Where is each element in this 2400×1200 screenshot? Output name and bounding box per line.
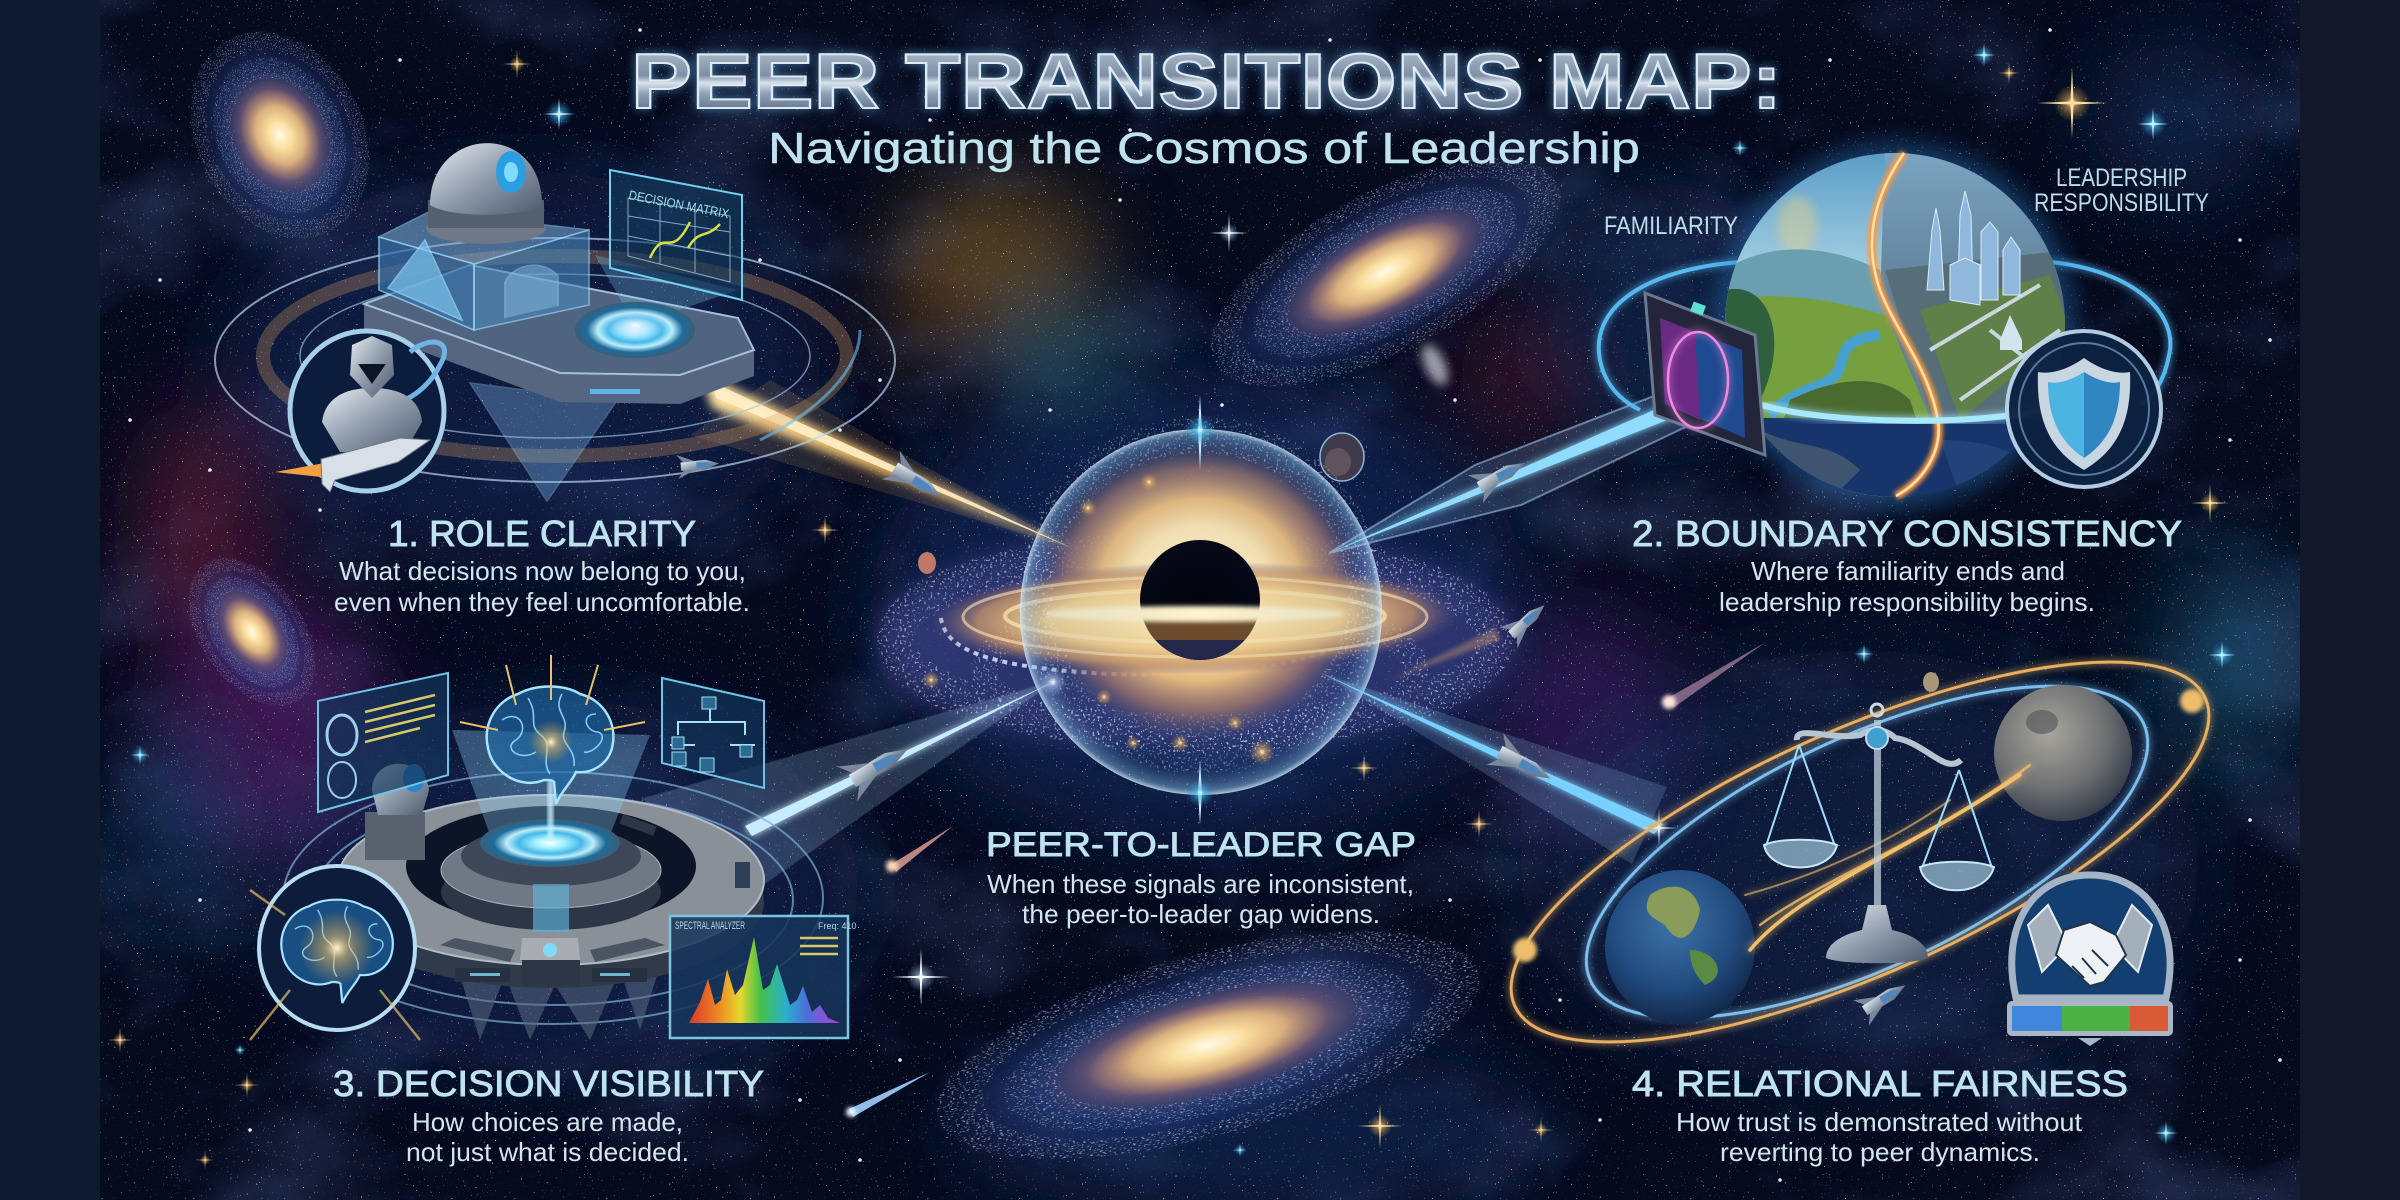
station ring (338, 795, 764, 988)
title: PEER TRANSITIONS MAP: (631, 37, 1782, 125)
decision matrix panel: DECISION MATRIX (627, 187, 731, 221)
description: leadership responsibility begins. (1719, 587, 2095, 617)
earth planet (1605, 870, 1755, 1024)
description: the peer-to-leader gap widens. (1022, 899, 1380, 929)
description: even when they feel uncomfortable. (334, 587, 750, 617)
label: leadership responsibility: LEADERSHIP (2056, 164, 2187, 192)
connector: role clarity beam (690, 372, 1072, 548)
shield medallion (2007, 331, 2161, 487)
moon planet (1994, 685, 2132, 821)
small pale galaxy (1417, 341, 1453, 389)
trust gauge (2007, 1001, 2173, 1046)
description: What decisions now belong to you, (339, 556, 746, 586)
connector: decision beam (643, 668, 1067, 883)
observatory dome (426, 143, 546, 244)
black hole: outer swirl (875, 530, 1515, 750)
panel: role clarity (215, 143, 895, 617)
orbit rings (283, 772, 823, 1024)
black hole: golden halo (1032, 438, 1368, 742)
blue orbit (1542, 619, 2192, 1085)
description (987, 869, 1414, 929)
small planet near black hole (1320, 433, 1364, 481)
comets (846, 628, 1766, 1117)
right flowchart panel (662, 678, 764, 788)
panel: relational fairness (1465, 587, 2255, 1167)
portal (1645, 293, 1765, 455)
left data panel (318, 673, 448, 812)
black hole: accretion disk (929, 557, 1461, 679)
spectral analyzer (670, 916, 857, 1038)
heading: 1. ROLE CLARITY (388, 513, 696, 554)
heading: 3. DECISION VISIBILITY (333, 1063, 764, 1104)
energy ring back (1599, 262, 2170, 410)
description (406, 1107, 689, 1167)
description (1676, 1107, 2083, 1167)
hologram brain (460, 655, 645, 804)
panel: decision visibility (250, 655, 857, 1167)
black hole: glass sphere (1020, 429, 1382, 795)
left margin band (0, 0, 100, 1200)
description: reverting to peer dynamics. (1720, 1137, 2040, 1167)
heading: 2. BOUNDARY CONSISTENCY (1632, 513, 2182, 554)
galaxy: small left (159, 531, 345, 733)
black hole: band across horizon (1045, 606, 1345, 662)
black hole: sphere flares and lights (918, 395, 1275, 825)
handshake medallion (2012, 875, 2170, 998)
label: familiarity: FAMILIARITY (1604, 212, 1738, 240)
small ship (1853, 973, 1913, 1026)
orbit rings (215, 238, 895, 482)
label: leadership responsibility (2034, 164, 2209, 217)
station spikes (455, 950, 665, 1040)
decision matrix panel (610, 170, 742, 300)
black hole: sphere speckle (1035, 435, 1365, 755)
orbit nodes (1513, 672, 2204, 962)
small orbit ship (676, 451, 720, 479)
galaxy: upper centre (1169, 105, 1601, 439)
energy ring front (1762, 405, 2040, 421)
panel: gap (986, 826, 1416, 929)
ship near black hole (1499, 595, 1554, 648)
galaxy: upper left (151, 0, 409, 275)
hologram cone (595, 255, 738, 325)
inverted crystal (470, 383, 616, 501)
description: When these signals are inconsistent, (987, 869, 1414, 899)
description: Where familiarity ends and (1751, 556, 2065, 586)
gold orbit (1465, 587, 2255, 1117)
description (1719, 556, 2095, 617)
subtitle: Navigating the Cosmos of Leadership (768, 124, 1640, 173)
station hub (441, 826, 661, 932)
brain medallion (250, 866, 420, 1040)
light pad (575, 302, 695, 358)
description: How trust is demonstrated without (1676, 1107, 2083, 1137)
black hole (875, 395, 1515, 825)
description: How choices are made, (412, 1107, 683, 1137)
right margin band (2300, 0, 2400, 1200)
golden streams (1745, 765, 2030, 950)
connector: fairness beam (1321, 673, 1678, 864)
panel: boundary consistency (1599, 143, 2209, 617)
spectral analyzer: SPECTRAL ANALYZER (675, 920, 745, 932)
label: leadership responsibility: RESPONSIBILITY (2034, 189, 2209, 217)
holo pad (480, 780, 620, 867)
hologram column (452, 730, 650, 835)
split planet (1715, 143, 2080, 510)
spectral analyzer: Freq: 410 (818, 921, 857, 931)
telescope (365, 764, 429, 860)
description: not just what is decided. (406, 1137, 689, 1167)
black hole: event horizon (1140, 540, 1260, 660)
galaxy: lower centre (902, 879, 1514, 1200)
description (334, 556, 750, 617)
station platform (364, 265, 754, 404)
balance scales (1764, 704, 1994, 963)
pilot medallion (275, 331, 445, 492)
connector: boundary beam (1329, 394, 1690, 553)
heading: PEER-TO-LEADER GAP (986, 826, 1416, 864)
glass building (379, 212, 589, 330)
heading: 4. RELATIONAL FAIRNESS (1632, 1063, 2128, 1104)
